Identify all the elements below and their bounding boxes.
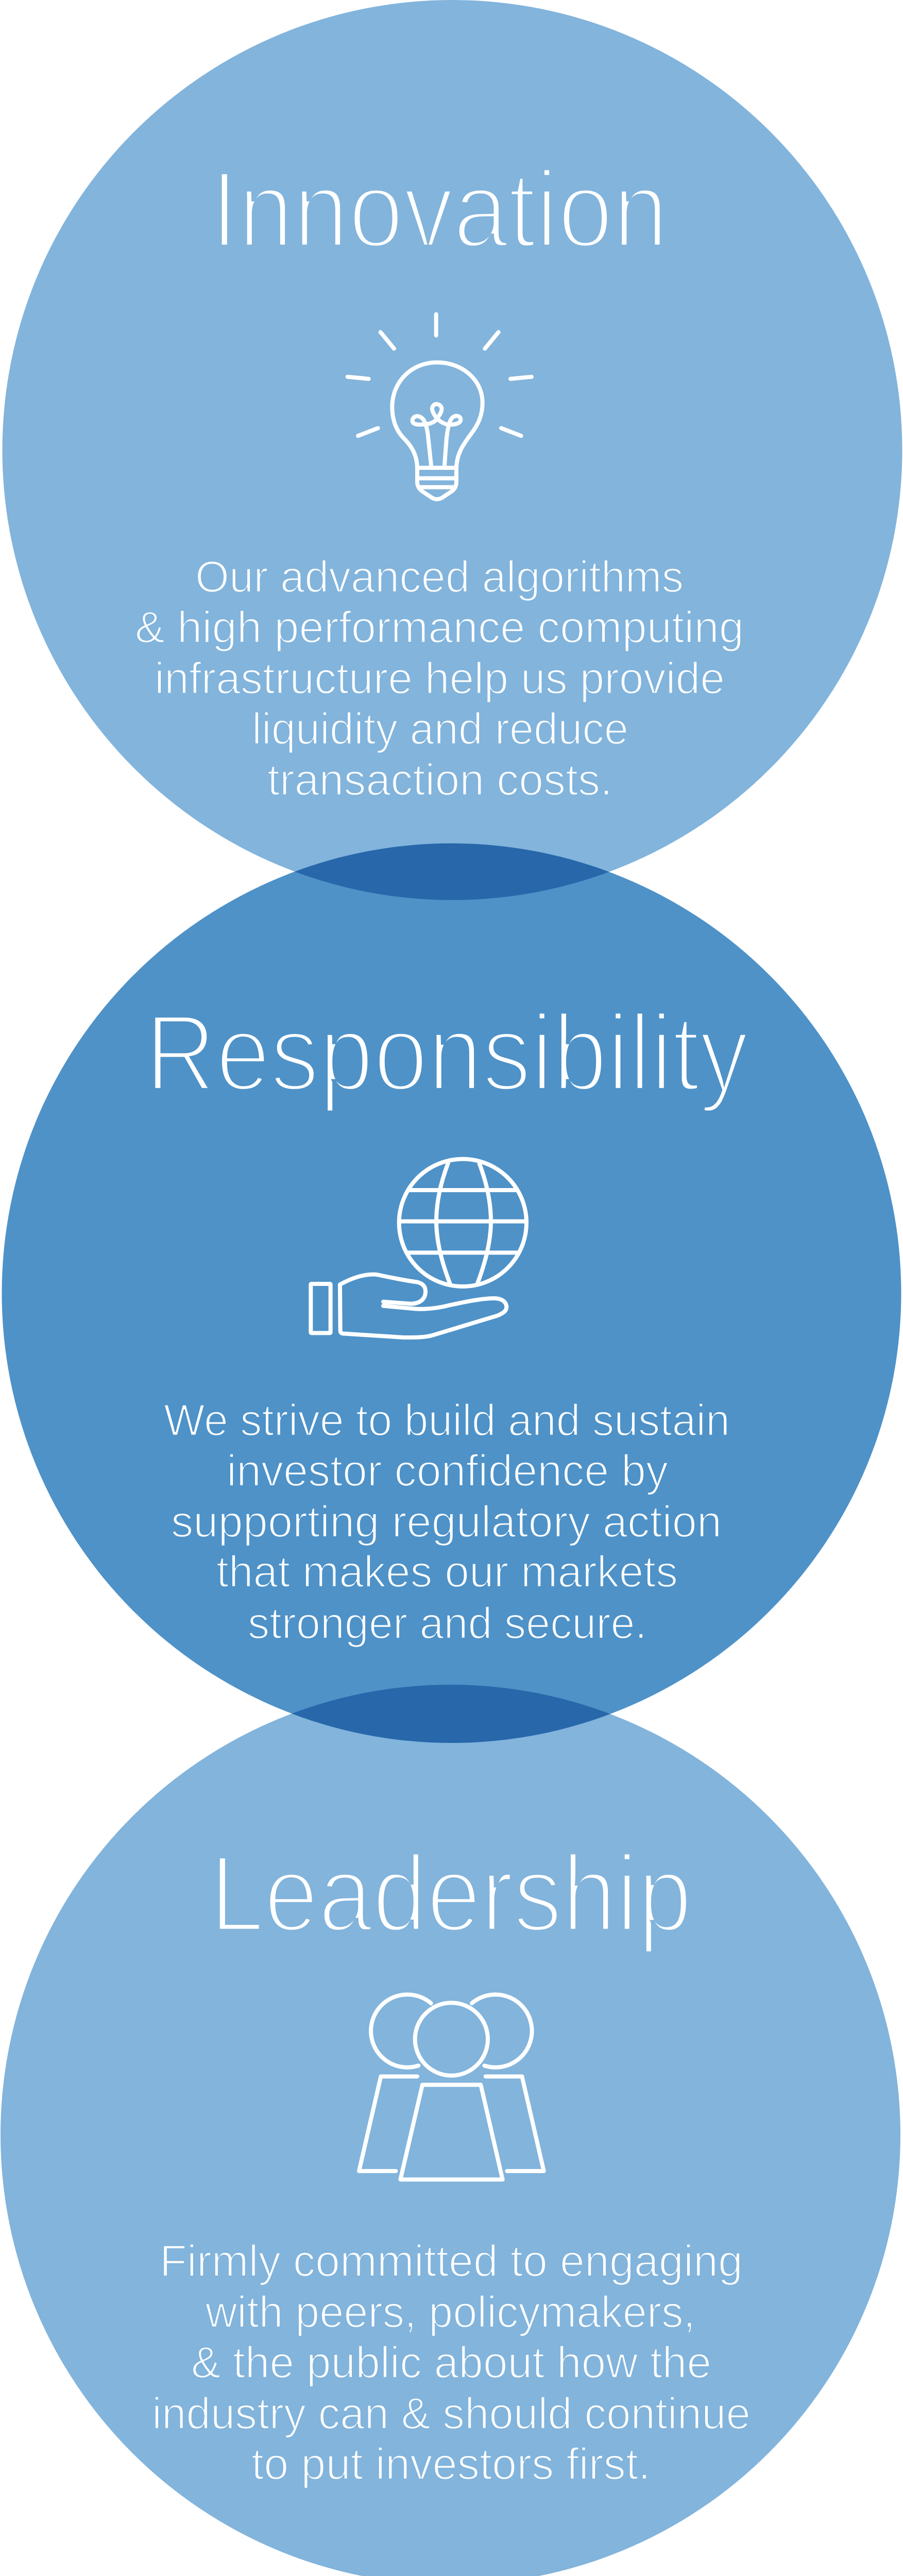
text: leadership description: [152, 2236, 751, 2489]
icon: light bulb: [348, 314, 532, 499]
text: leadership description: & the public about how the: [191, 2338, 711, 2387]
text: innovation description: infrastructure help us provide: [155, 654, 725, 703]
text: leadership description: Firmly committed to engaging: [160, 2236, 743, 2286]
icon: three people: [359, 1994, 544, 2179]
text: innovation description: Our advanced algorithms: [195, 552, 684, 602]
text: leadership description: industry can & should continue: [152, 2389, 751, 2438]
text: responsibility description: stronger and secure.: [248, 1599, 647, 1648]
overlap: innovation and responsibility: [295, 843, 609, 900]
heading: Leadership: Leadership: [210, 1833, 692, 1954]
text: leadership description: with peers, policymakers,: [205, 2287, 695, 2337]
section: responsibility content: [145, 992, 748, 1648]
panel: responsibility circle: [2, 843, 901, 1743]
section: leadership content: [152, 1833, 751, 2489]
text: responsibility description: supporting regulatory action: [171, 1497, 722, 1547]
panel: leadership circle: [1, 1685, 900, 2576]
text: innovation description: liquidity and reduce: [252, 704, 628, 754]
text: responsibility description: We strive to build and sustain: [164, 1396, 730, 1445]
text: innovation description: [135, 552, 744, 805]
text: responsibility description: that makes our markets: [216, 1547, 678, 1597]
text: responsibility description: investor confidence by: [227, 1446, 668, 1496]
icon: hand holding globe: [311, 1159, 526, 1337]
text: innovation description: & high performance computing: [135, 603, 744, 652]
text: innovation description: transaction costs.: [267, 755, 612, 805]
heading: Responsibility: Responsibility: [145, 992, 748, 1113]
overlap: responsibility and leadership: [292, 1685, 610, 1743]
text: responsibility description: [164, 1396, 730, 1648]
text: leadership description: to put investors first.: [251, 2439, 651, 2489]
section: innovation content: [135, 148, 744, 805]
heading: Innovation: Innovation: [211, 148, 668, 270]
panel: innovation circle: [2, 0, 902, 900]
